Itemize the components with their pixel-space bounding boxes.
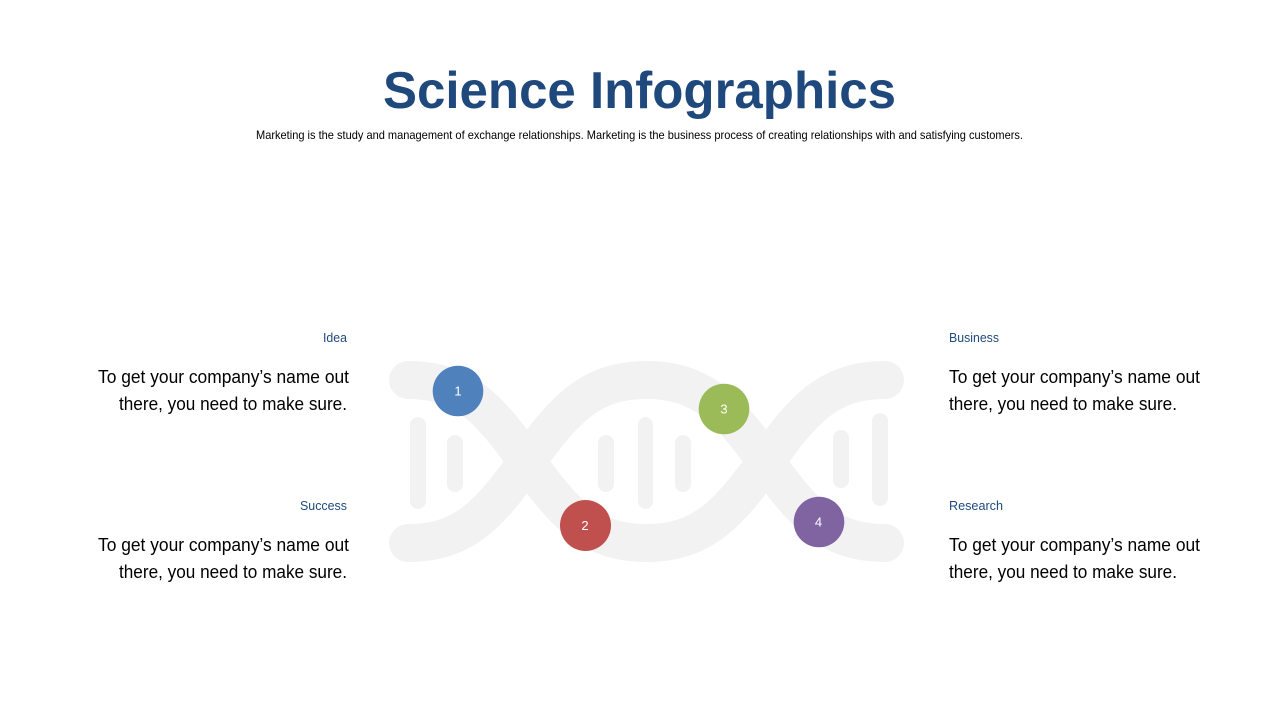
title: Science Infographics	[383, 62, 896, 120]
text block: Success	[98, 498, 349, 582]
text block: Idea: there, you need to make sure.	[119, 394, 347, 414]
diagram: DNA helix	[408, 366, 888, 551]
marker 1	[433, 366, 483, 416]
text block: Research: Research	[949, 498, 1003, 513]
text block: Business	[949, 330, 1200, 414]
DNA strands	[408, 380, 885, 543]
subtitle: Marketing is the study and management of exchange relationships. Marketing is the business process of creating relationships with and satisfying customers.	[256, 128, 1023, 142]
text block: Success: there, you need to make sure.	[119, 562, 347, 582]
text block: Idea	[98, 330, 349, 414]
text block: Research	[949, 498, 1200, 582]
marker 2: 2	[581, 518, 589, 533]
text block: Idea: Idea	[323, 330, 348, 345]
text block: Success: Success	[300, 498, 347, 513]
marker 4: 4	[815, 514, 822, 530]
text block: Idea: To get your company’s name out	[98, 367, 349, 387]
DNA rungs	[410, 413, 888, 509]
marker 2	[560, 500, 611, 551]
text block: Business: there, you need to make sure.	[949, 394, 1177, 414]
text block: Research: there, you need to make sure.	[949, 562, 1177, 582]
marker 3: 3	[720, 402, 728, 416]
text block: Success: To get your company’s name out	[98, 535, 349, 555]
text block: Business: To get your company’s name out	[949, 367, 1200, 387]
text block: Research: To get your company’s name out	[949, 535, 1200, 555]
marker 4	[794, 497, 844, 547]
marker 3	[699, 384, 749, 434]
marker 1: 1	[454, 384, 462, 398]
text block: Business: Business	[949, 330, 999, 345]
